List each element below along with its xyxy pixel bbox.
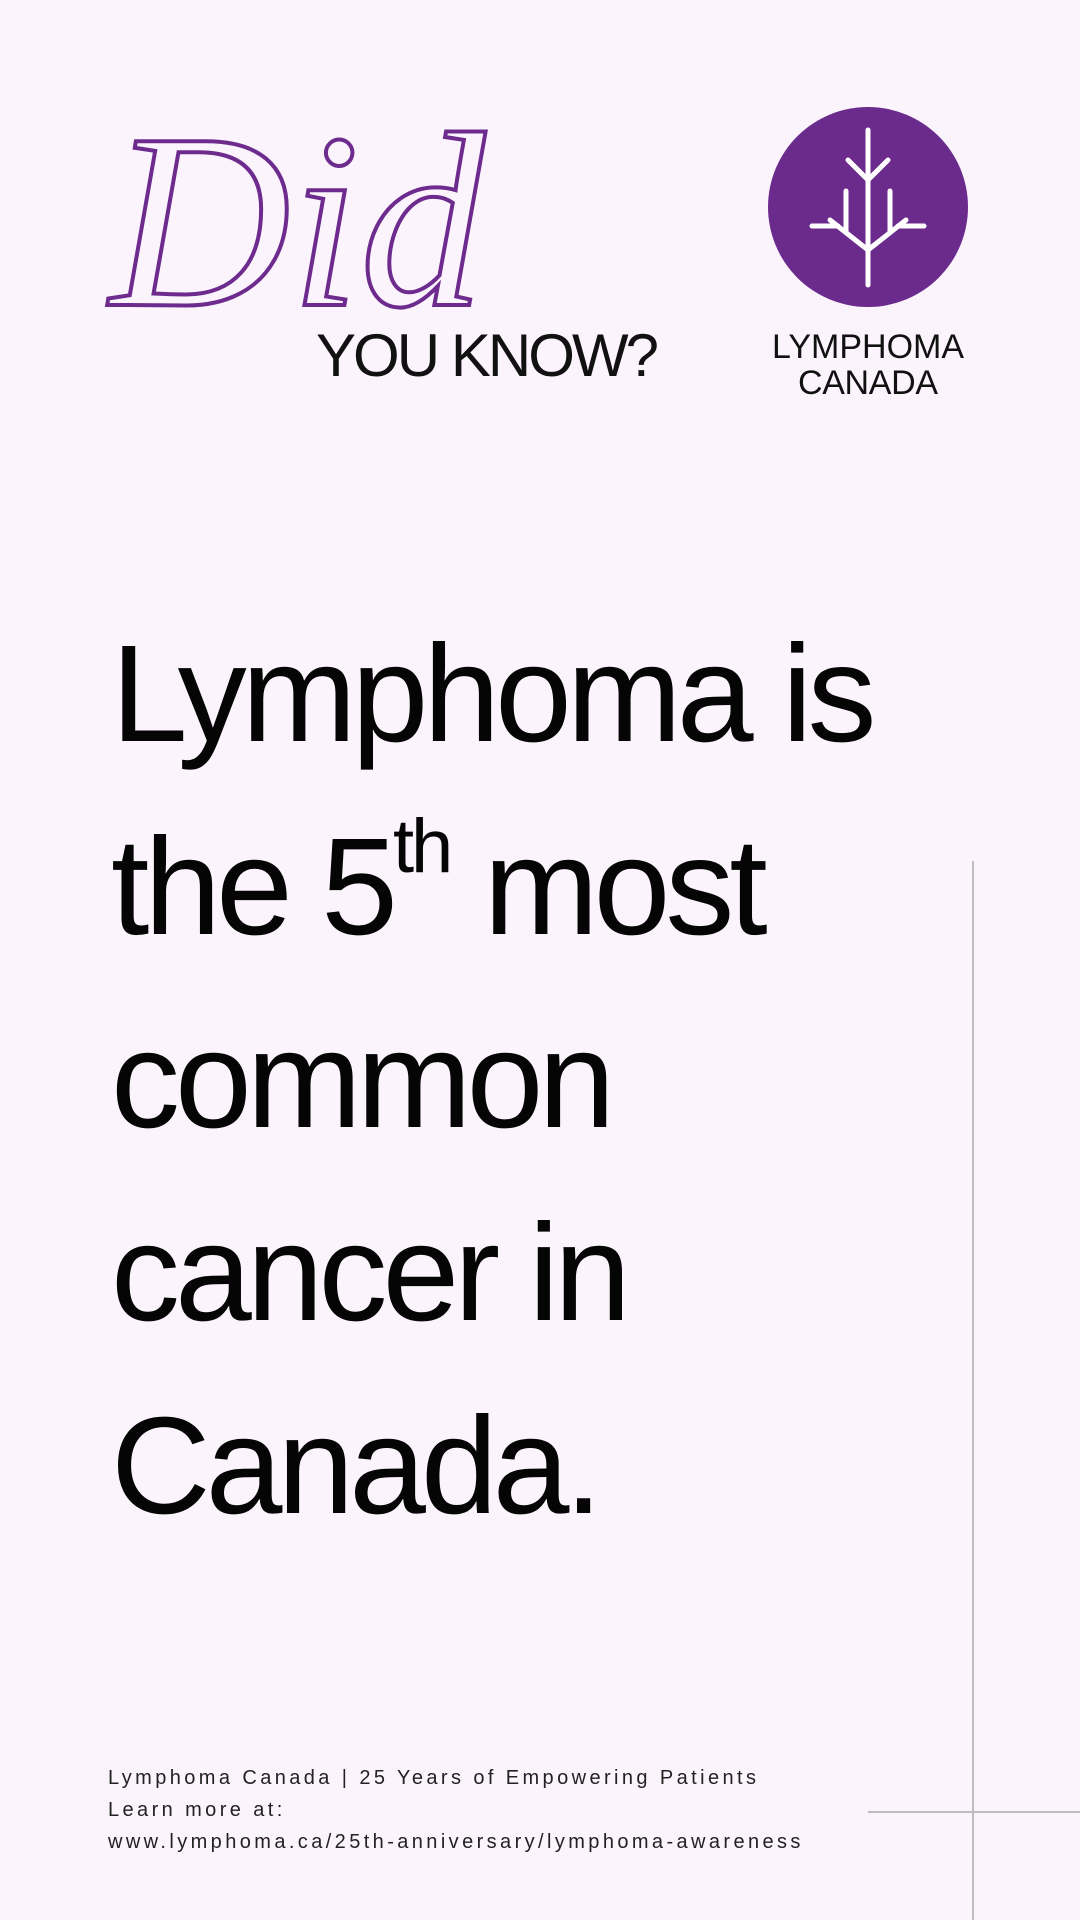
main statement: Canada. bbox=[111, 1389, 598, 1543]
header: did you know bbox=[104, 100, 659, 389]
footer text: Learn more at: bbox=[108, 1799, 286, 1821]
footer text bbox=[108, 1767, 804, 1853]
text YOU KNOW?: YOU KNOW? bbox=[316, 322, 659, 389]
footer text: www.lymphoma.ca/25th-anniversary/lymphoma-awareness bbox=[108, 1831, 804, 1853]
main statement: common bbox=[111, 1003, 610, 1157]
logo text: LYMPHOMA bbox=[772, 328, 964, 366]
main statement: cancer in bbox=[111, 1196, 626, 1350]
logo text bbox=[772, 328, 964, 402]
decorative lines bbox=[972, 861, 974, 1920]
main statement: Lymphoma is bbox=[111, 617, 872, 771]
icon: tree in circle bbox=[768, 107, 968, 307]
footer text: Lymphoma Canada | 25 Years of Empowering Patients bbox=[108, 1767, 759, 1789]
main statement bbox=[111, 617, 872, 1543]
logo: Lymphoma Canada bbox=[768, 107, 968, 400]
main statement: the 5th most bbox=[111, 804, 763, 964]
